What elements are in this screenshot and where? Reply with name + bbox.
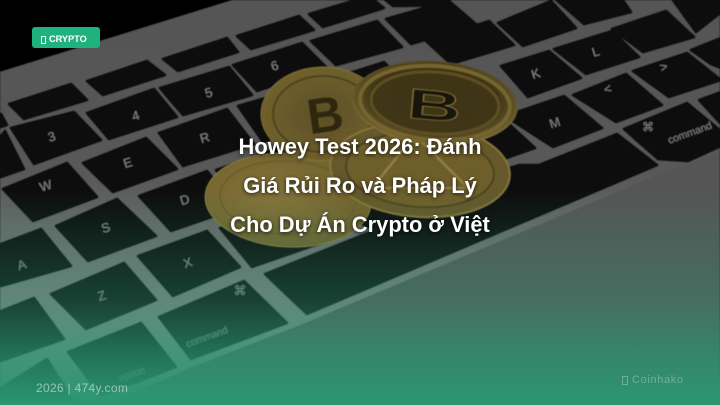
title: Cho Dự Án Crypto ở Việt — [230, 212, 490, 237]
key legends: command — [185, 325, 230, 350]
key legends: X — [181, 254, 194, 271]
key legends: 5 — [203, 84, 214, 101]
key legends: command — [666, 120, 714, 147]
key legends: W — [38, 177, 54, 195]
coins: B — [303, 85, 347, 145]
key legends: A — [15, 256, 28, 273]
key legends: E — [121, 154, 134, 171]
key legends: 3 — [46, 128, 57, 145]
key legends: 4 — [130, 107, 141, 124]
key legends: K — [529, 65, 542, 82]
key legends: R — [198, 129, 211, 146]
key legends: L — [590, 43, 601, 60]
key legends: D — [178, 191, 191, 208]
title: Giá Rủi Ro và Pháp Lý — [243, 173, 477, 198]
key legends: option — [117, 365, 147, 384]
category badge: CRYPTO — [49, 34, 87, 44]
key legends: > — [658, 58, 670, 75]
footer: year and site: 2026 | 474y.com — [36, 381, 128, 395]
coins: B — [405, 79, 463, 131]
key legends: < — [602, 80, 614, 97]
category badge — [32, 27, 100, 48]
key legends: 6 — [269, 57, 280, 74]
key legends: S — [99, 219, 112, 236]
key legends: Z — [96, 287, 108, 304]
key legends: M — [547, 114, 562, 131]
source brand: Coinhako — [632, 374, 684, 386]
coins — [203, 55, 521, 251]
title: Howey Test 2026: Đánh — [239, 134, 481, 158]
title — [228, 134, 490, 238]
key legends: ⌘ — [234, 283, 246, 298]
key legends: ⌘ — [642, 120, 654, 134]
